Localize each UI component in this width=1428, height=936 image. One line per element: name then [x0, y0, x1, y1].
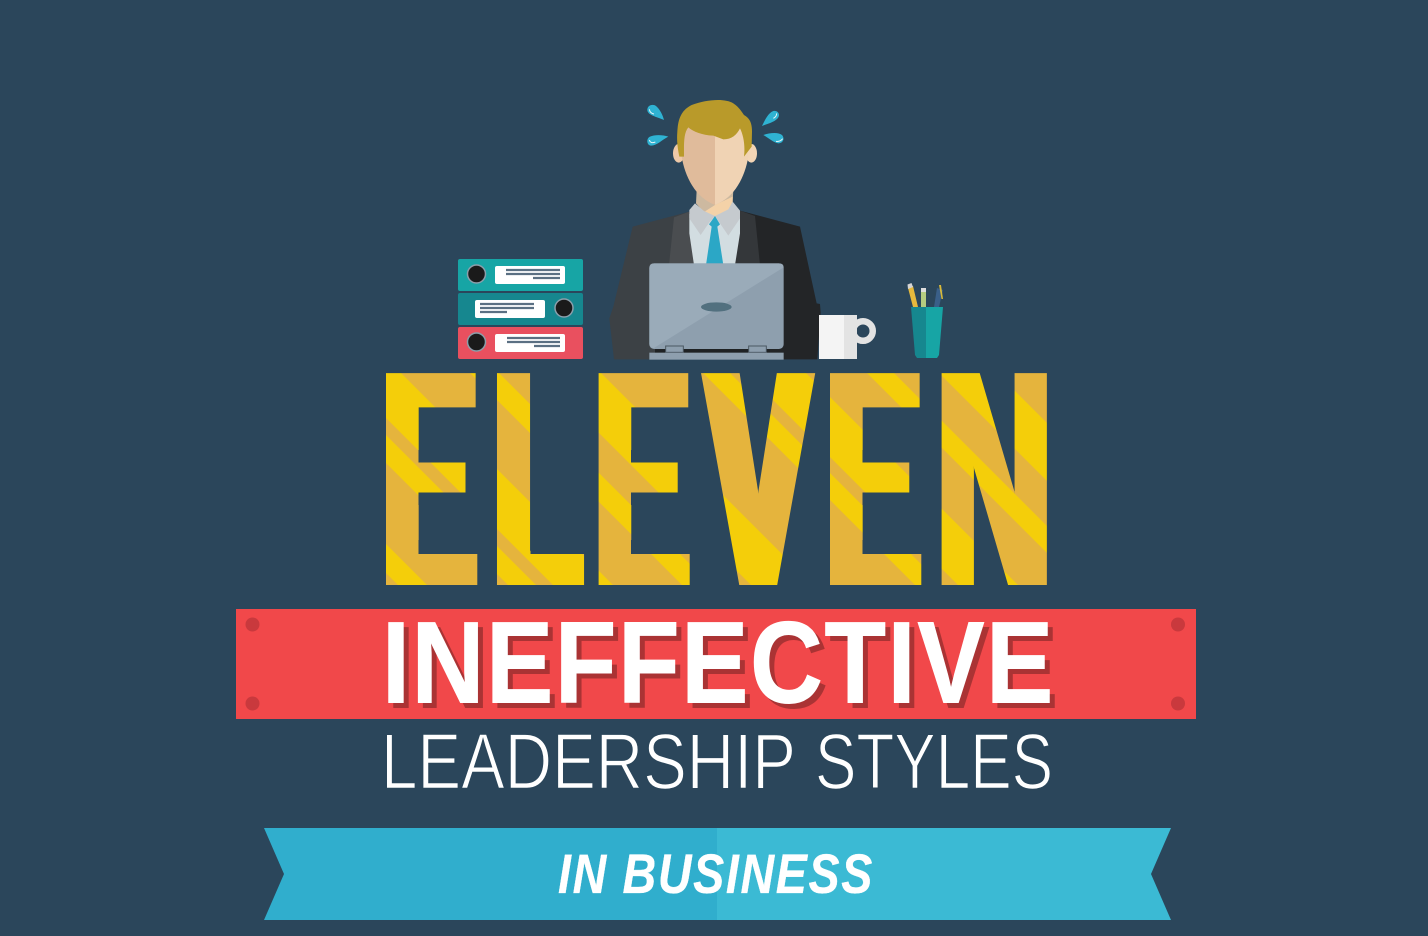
icon: coffee mug [819, 315, 873, 359]
icon: head [673, 100, 757, 205]
icon: dark teal binder [458, 293, 583, 325]
icon: jacket [609, 211, 821, 359]
icon: stack of binders [458, 259, 583, 359]
title: ELEVEN: L [493, 308, 583, 651]
heading: LEADERSHIP STYLES: STYLES [815, 716, 1053, 806]
icon: sweat drops [647, 105, 783, 146]
panel: blue ribbon [264, 828, 1171, 920]
heading: IN BUSINESS: IN BUSINESS [558, 842, 874, 905]
title: ELEVEN: E [826, 306, 922, 650]
heading: INEFFECTIVE: INEFFECTIVE [382, 598, 1055, 728]
title: ELEVEN: E [595, 306, 691, 650]
title: ELEVEN: V [708, 308, 808, 651]
icon: rivets [246, 618, 1185, 710]
title: ELEVEN: N [937, 306, 1052, 650]
icon: shirt and tie [689, 190, 740, 265]
title: ELEVEN: E [382, 306, 478, 650]
icon: laptop [649, 263, 784, 360]
icon: pencil cup [908, 283, 943, 358]
heading: LEADERSHIP STYLES: LEADERSHIP [381, 716, 796, 806]
title: ELEVEN [382, 306, 1052, 651]
panel: red banner [236, 598, 1196, 728]
icon: red binder [458, 327, 583, 359]
icon: teal binder [458, 259, 583, 291]
illustration: businessman at laptop [609, 100, 821, 360]
